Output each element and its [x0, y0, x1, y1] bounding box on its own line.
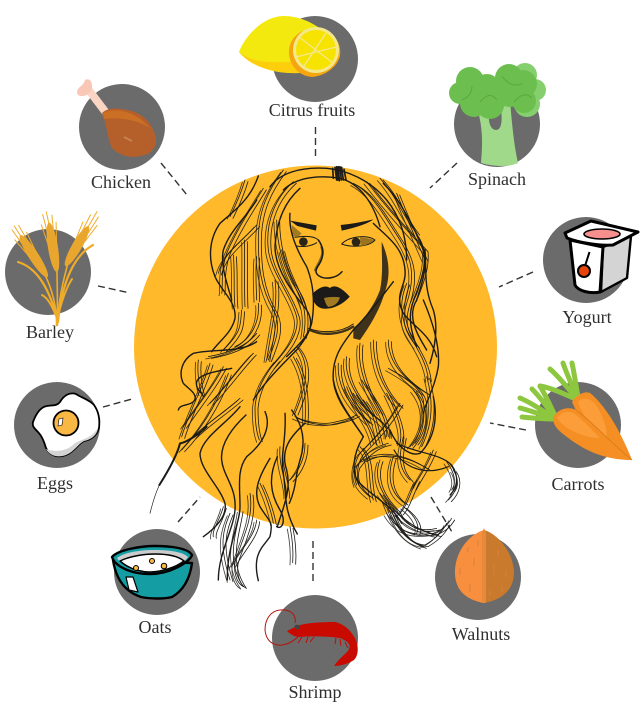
label: Eggs	[37, 473, 73, 493]
hair strands, fine	[182, 170, 457, 587]
label: Oats	[138, 617, 172, 637]
icon: chicken drumstick	[77, 79, 156, 157]
icon group: Shrimp	[265, 595, 358, 702]
label: Barley	[26, 322, 74, 342]
central yellow circle	[134, 166, 497, 528]
icon group: Walnuts	[435, 528, 521, 644]
icon: walnut	[455, 528, 514, 603]
label: Shrimp	[288, 682, 342, 702]
label: Chicken	[91, 172, 151, 192]
face features	[290, 219, 375, 334]
illustration: woman with long wavy hair	[150, 167, 460, 589]
label: Yogurt	[562, 307, 612, 327]
icon: bowl of oats	[112, 546, 192, 598]
connector dashes	[98, 127, 533, 581]
lemon shadow	[239, 52, 300, 73]
hair strands, heavy	[150, 168, 457, 581]
icon: leafy stalk	[449, 63, 546, 166]
label: Spinach	[468, 169, 526, 189]
icon group: Spinach	[449, 63, 546, 189]
icon group: Yogurt	[543, 217, 638, 327]
icon: fried egg	[33, 393, 99, 456]
denser parallel hair strands	[179, 172, 460, 589]
icon: barley stalks	[8, 208, 103, 325]
icon: yogurt cup	[565, 221, 638, 293]
cheek and neck shading	[333, 167, 389, 340]
icon: lemon	[239, 16, 330, 73]
icon group: Eggs	[14, 382, 100, 493]
icon: shrimp	[265, 610, 358, 666]
label: Citrus fruits	[269, 100, 355, 120]
label: Carrots	[552, 474, 604, 494]
icon group: Barley	[5, 208, 103, 342]
icon group: Carrots	[520, 363, 632, 494]
icon: carrots	[520, 363, 632, 460]
icon group: Citrus fruits	[239, 16, 358, 120]
label: Walnuts	[452, 624, 510, 644]
icon group: Oats	[112, 529, 200, 637]
icon group: Chicken	[77, 79, 165, 192]
icon: lemon slice	[289, 27, 340, 77]
